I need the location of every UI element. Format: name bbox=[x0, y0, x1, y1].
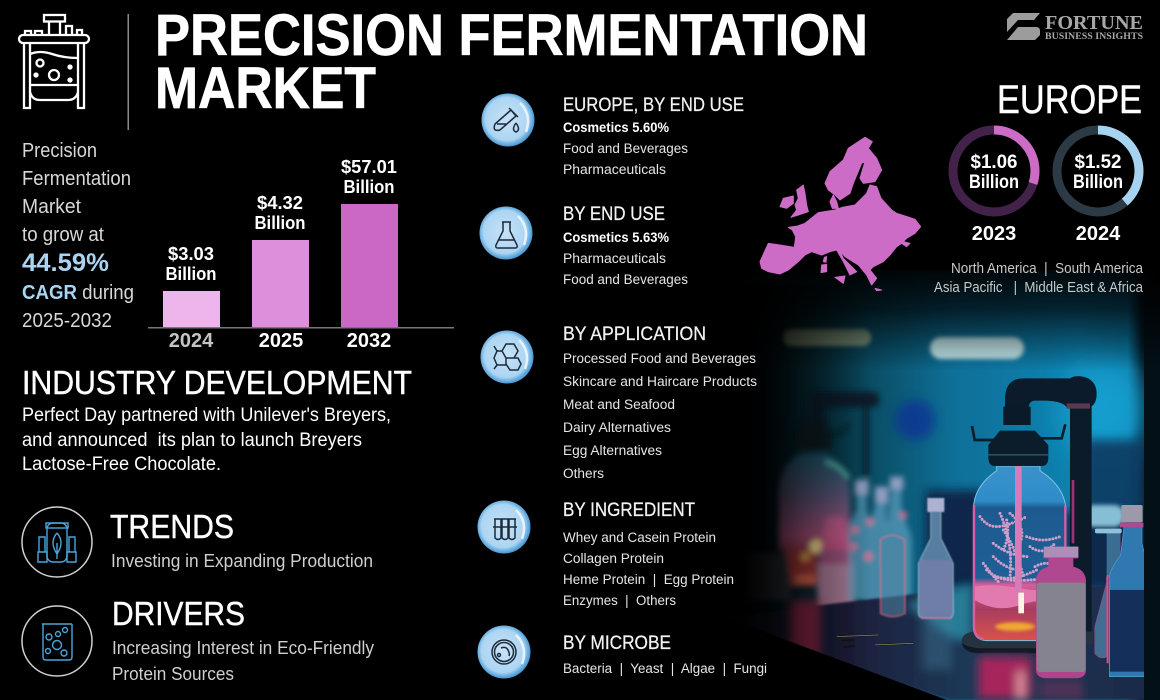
drivers text: DRIVERS bbox=[112, 595, 245, 632]
segment: by end use: BY END USE bbox=[563, 204, 665, 225]
donut: 2023: 2023 bbox=[972, 223, 1016, 245]
donut: 2023: Billion bbox=[969, 172, 1019, 193]
icon: flask bbox=[480, 206, 532, 260]
segment: Europe by end use: Pharmaceuticals bbox=[563, 162, 666, 177]
segment: Europe by end use: Food and Beverages bbox=[563, 141, 688, 156]
icon: test tubes rack bbox=[478, 500, 530, 554]
title: MARKET bbox=[155, 56, 376, 121]
logo: BUSINESS INSIGHTS bbox=[1045, 31, 1143, 41]
industry development: and announced its plan to launch Breyers bbox=[22, 430, 362, 451]
other regions bbox=[934, 261, 1144, 296]
drivers text: Protein Sources bbox=[112, 664, 234, 684]
segment: by ingredient: BY INGREDIENT bbox=[563, 500, 695, 521]
segment: by ingredient: Collagen Protein bbox=[563, 551, 664, 566]
drivers text bbox=[112, 595, 374, 684]
icon: molecule bbox=[480, 330, 534, 384]
industry development: Perfect Day partnered with Unilever's Breyers, bbox=[22, 405, 391, 426]
segment: by application: Egg Alternatives bbox=[563, 443, 662, 458]
drivers text: Increasing Interest in Eco-Friendly bbox=[112, 638, 374, 658]
segment: by application: Dairy Alternatives bbox=[563, 420, 671, 435]
counter bbox=[700, 585, 1160, 700]
blurred background apparatus bbox=[747, 392, 912, 610]
segment: Europe by end use bbox=[563, 95, 744, 177]
logo bbox=[1007, 12, 1143, 41]
CAGR text: Precision bbox=[22, 140, 97, 162]
bar chart: Billion bbox=[344, 177, 394, 197]
CAGR text: Market bbox=[22, 196, 81, 218]
scene fades bbox=[700, 260, 1160, 370]
icon: drivers bbox=[22, 606, 92, 676]
bar chart bbox=[148, 157, 454, 352]
trends text: Investing in Expanding Production bbox=[111, 551, 373, 571]
segment: by end use: Cosmetics 5.63% bbox=[563, 230, 669, 245]
segment: by ingredient: Whey and Casein Protein bbox=[563, 530, 716, 545]
bar chart: 2032 bbox=[347, 330, 391, 352]
donut: 2024: $1.52 bbox=[1074, 152, 1122, 173]
donut: 2024 bbox=[1057, 130, 1139, 245]
bar chart: Billion bbox=[166, 264, 216, 284]
segment: Europe by end use: Cosmetics 5.60% bbox=[563, 120, 669, 135]
segment: by application: BY APPLICATION bbox=[563, 324, 706, 345]
segment: by end use bbox=[563, 204, 688, 287]
CAGR text bbox=[22, 140, 134, 332]
segment: by end use: Food and Beverages bbox=[563, 272, 688, 287]
CAGR text: 2025-2032 bbox=[22, 310, 112, 332]
bar chart: $4.32 bbox=[257, 193, 303, 213]
segment: by ingredient: Heme Protein | Egg Protein bbox=[563, 572, 734, 587]
CAGR text: CAGR during bbox=[22, 282, 134, 304]
main apparatus bbox=[962, 376, 1148, 678]
segment: by application: Meat and Seafood bbox=[563, 397, 675, 412]
donut: 2023: $1.06 bbox=[970, 152, 1018, 173]
segment: by application: Others bbox=[563, 466, 604, 481]
industry development bbox=[22, 364, 412, 475]
trends text bbox=[110, 508, 373, 571]
icon: test tube bbox=[482, 94, 534, 146]
bar chart: 2024 bbox=[169, 330, 214, 352]
segment: by microbe: Bacteria | Yeast | Algae | Fungi bbox=[563, 661, 767, 676]
other regions: Asia Pacific | Middle East & Africa bbox=[934, 280, 1144, 296]
icon: microbe bbox=[478, 626, 530, 678]
donut: 2024: 2024 bbox=[1076, 223, 1121, 245]
segment: by application bbox=[563, 324, 757, 481]
industry development: INDUSTRY DEVELOPMENT bbox=[22, 364, 412, 401]
logo: FORTUNE bbox=[1045, 12, 1143, 34]
segment: by microbe: BY MICROBE bbox=[563, 633, 671, 654]
segment: by microbe bbox=[563, 633, 767, 676]
trends text: TRENDS bbox=[110, 508, 234, 545]
divider bbox=[128, 14, 129, 130]
bar chart: 2025 bbox=[259, 330, 303, 352]
segment: by ingredient: Enzymes | Others bbox=[563, 593, 676, 608]
CAGR text: Fermentation bbox=[22, 168, 131, 190]
segment: Europe by end use: EUROPE, BY END USE bbox=[563, 95, 744, 116]
donut: 2023 bbox=[953, 130, 1035, 245]
lab photo bbox=[700, 260, 1160, 700]
CAGR text: to grow at bbox=[22, 224, 104, 246]
CAGR text: 44.59% bbox=[22, 249, 109, 277]
industry development: Lactose-Free Chocolate. bbox=[22, 454, 221, 475]
bar chart: $57.01 bbox=[341, 157, 397, 177]
segment: by application: Skincare and Haircare Products bbox=[563, 374, 757, 389]
icon: trends bbox=[22, 507, 92, 577]
map: Europe bbox=[760, 137, 921, 291]
icon: fermenter bbox=[19, 15, 89, 108]
title bbox=[155, 3, 868, 121]
donut: 2024: Billion bbox=[1073, 172, 1123, 193]
title: PRECISION FERMENTATION bbox=[155, 3, 868, 68]
segment: by application: Processed Food and Beverages bbox=[563, 351, 756, 366]
segment: by ingredient bbox=[563, 500, 734, 608]
other regions: North America | South America bbox=[951, 261, 1144, 277]
bar chart: Billion bbox=[254, 213, 306, 233]
segment: by end use: Pharmaceuticals bbox=[563, 251, 666, 266]
bar chart: $3.03 bbox=[168, 244, 214, 264]
